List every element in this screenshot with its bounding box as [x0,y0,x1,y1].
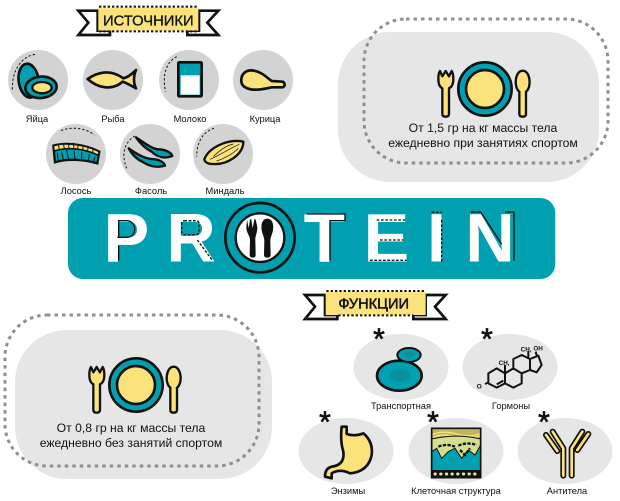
source labels: Яйца [26,114,49,124]
function: enzymes: Энзимы [331,486,365,496]
letters: P [104,201,149,277]
icon: salmon [46,124,106,184]
icon: plate, fork and spoon [438,62,530,117]
panel: intake with sport [338,19,608,182]
function: antibodies: * [538,406,550,439]
function: antibodies: Антитела [547,486,588,496]
icon: milk can [159,50,219,110]
panel: intake without sport [5,315,272,479]
icon: almond [193,124,253,184]
letters: T [304,201,345,277]
function: cell structure: Клеточная структура [411,486,502,496]
function: enzymes [298,406,394,496]
text: intake without sport: От 0,8 гр на кг массы тела [57,421,206,435]
function: hormones: CH, [521,346,532,353]
heading ribbon: sources: ИСТОЧНИКИ [103,12,194,29]
text: intake with sport [388,121,578,150]
source labels: Молоко [174,114,206,124]
text: intake without sport: ежедневно без занятий спортом [40,436,222,450]
letters [104,201,515,277]
function: transport: * [373,323,385,356]
text: intake without sport [40,421,222,450]
main banner: PROTEIN [68,198,555,279]
letter shadow lines [117,212,514,262]
function: hormones: O [477,384,482,391]
function: transport: Транспортная [371,401,431,411]
function: hormones: Гормоны [492,401,530,411]
icon: beans [120,124,180,184]
text: intake with sport: ежедневно при занятиях спортом [388,136,578,150]
source labels: Миндаль [206,186,245,196]
icon: chicken leg [233,50,293,110]
letters: R [166,201,216,277]
heading ribbon: functions [305,291,446,319]
text: intake with sport: От 1,5 гр на кг массы тела [409,121,558,135]
function: cell structure: * [427,406,439,439]
function: hormones [462,323,558,411]
letters: I [427,201,446,277]
heading ribbon: functions: ФУНКЦИИ [338,297,409,313]
function: cell structure [408,406,504,496]
source labels: Курица [250,114,281,124]
icon: plate, fork and spoon [89,358,181,413]
source labels [26,114,281,196]
heading ribbon: sources [78,7,218,35]
icon: fish [83,50,143,110]
function: antibodies [518,406,612,496]
letters: E [364,201,409,277]
letters: N [465,201,515,277]
source labels: Лосось [61,186,91,196]
function: hormones: * [481,323,493,356]
function: hormones: CH, [499,360,510,367]
function: hormones: OH [533,345,543,352]
source labels: Рыба [101,114,125,124]
source labels: Фасоль [135,186,167,196]
icon: fork and spoon emblem [225,203,295,272]
panel: sources food circles [8,50,293,196]
function: enzymes: * [319,406,331,439]
function: transport [354,323,448,411]
icon: eggs [8,50,68,110]
